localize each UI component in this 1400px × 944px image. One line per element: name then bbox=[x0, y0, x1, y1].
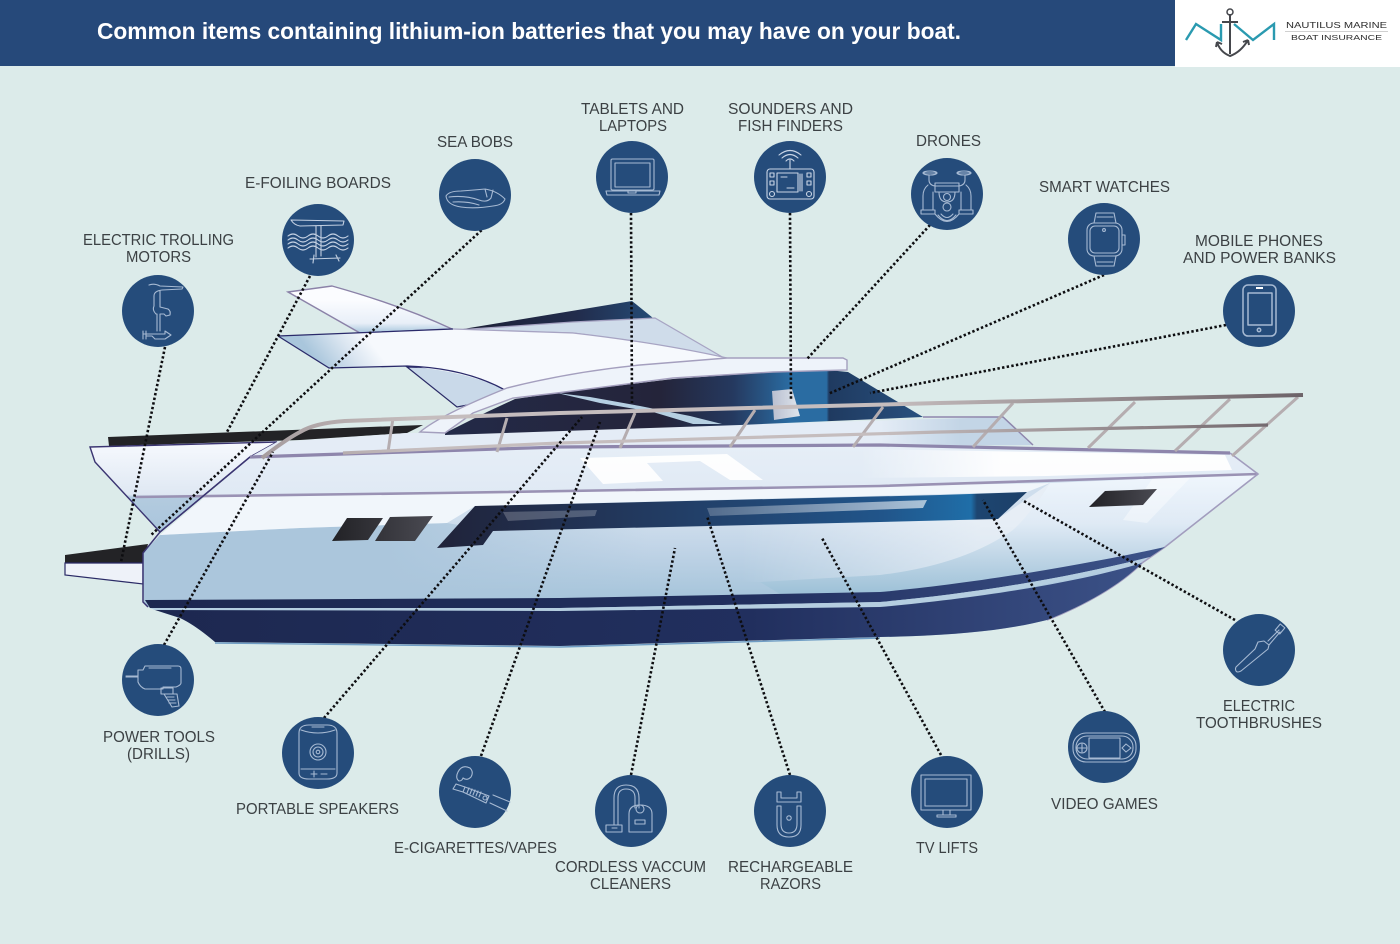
item: tablets and laptops bbox=[581, 101, 684, 213]
label: (DRILLS) bbox=[127, 746, 190, 763]
label: AND POWER BANKS bbox=[1183, 250, 1336, 267]
bow light panel bbox=[1123, 478, 1190, 523]
label bbox=[1183, 233, 1336, 267]
icon: e-foil board bbox=[288, 220, 348, 263]
label: ELECTRIC bbox=[1223, 698, 1295, 715]
label bbox=[728, 859, 853, 893]
item: sounders and fish finders bbox=[728, 101, 853, 213]
leader: toothbrushes bbox=[1022, 500, 1235, 620]
icon: smart watch bbox=[1087, 213, 1125, 266]
cabin glass light streak bbox=[557, 393, 722, 424]
logo: Nautilus Marine Boat Insurance bbox=[1175, 0, 1400, 67]
icon: razor bbox=[777, 792, 801, 837]
leader: sea bobs bbox=[150, 227, 485, 536]
label bbox=[1196, 698, 1322, 732]
windshield light panel bbox=[457, 318, 724, 358]
label: ELECTRIC TROLLING bbox=[83, 232, 234, 249]
label bbox=[83, 232, 234, 266]
icon: drone bbox=[921, 171, 973, 222]
logo wordmark: NAUTILUS MARINE bbox=[1286, 21, 1387, 30]
item: video games bbox=[1051, 711, 1158, 813]
leader: power tools bbox=[164, 452, 273, 645]
long hull window bbox=[437, 492, 1027, 548]
item: cordless vacuum cleaners bbox=[555, 775, 706, 893]
label: CLEANERS bbox=[590, 876, 671, 893]
stern lower solid blue panel bbox=[143, 525, 390, 602]
leader: sounders bbox=[790, 213, 791, 400]
label: TV LIFTS bbox=[916, 840, 978, 857]
label: MOBILE PHONES bbox=[1195, 233, 1323, 250]
icon: fish finder bbox=[767, 150, 814, 199]
label: E-CIGARETTES/VAPES bbox=[394, 840, 557, 857]
white band below belt bbox=[160, 483, 1050, 535]
flybridge deck bbox=[278, 329, 727, 390]
label bbox=[728, 101, 853, 135]
hull stripe upper bbox=[145, 547, 1165, 608]
hull main bbox=[143, 445, 1258, 646]
item: power tools bbox=[103, 644, 215, 763]
label: DRONES bbox=[916, 133, 981, 150]
item: tv lifts bbox=[911, 756, 983, 857]
item: drones bbox=[911, 133, 983, 230]
item: mobile phones and power banks bbox=[1183, 233, 1336, 347]
logo monogram N M bbox=[1186, 24, 1274, 40]
icon: toothbrush bbox=[1236, 624, 1285, 672]
item: electric trolling motors bbox=[83, 232, 234, 347]
label bbox=[581, 101, 684, 135]
label: E-FOILING BOARDS bbox=[245, 175, 391, 192]
leader: tv lifts bbox=[822, 538, 941, 755]
hull waterline stripe bbox=[150, 557, 1150, 611]
item: rechargeable razors bbox=[728, 775, 853, 893]
icon: laptop bbox=[606, 159, 660, 195]
leader: mobile phones bbox=[870, 325, 1226, 393]
logo: Nautilus Marine Boat Insurance: BOAT INSURANCE bbox=[1291, 33, 1382, 42]
hull swoosh bbox=[700, 483, 1050, 582]
label: SEA BOBS bbox=[437, 134, 513, 151]
railings bbox=[262, 395, 1303, 458]
item: e-foiling boards bbox=[245, 175, 391, 276]
stern portholes bbox=[332, 516, 433, 541]
hull window reflections bbox=[503, 510, 597, 521]
label: POWER TOOLS bbox=[103, 729, 215, 746]
icon: sea bob bbox=[446, 189, 505, 208]
bow porthole bbox=[1089, 489, 1157, 507]
label: RAZORS bbox=[760, 876, 821, 893]
icon: smartphone bbox=[1243, 285, 1276, 336]
label: VIDEO GAMES bbox=[1051, 796, 1158, 813]
item: electric toothbrushes bbox=[1196, 614, 1322, 732]
flybridge strut bbox=[407, 367, 520, 407]
icon: speaker bbox=[299, 725, 337, 779]
label: SMART WATCHES bbox=[1039, 179, 1170, 196]
stern wing bbox=[90, 442, 277, 532]
deck highlight panels bbox=[580, 454, 763, 484]
windshield dark bbox=[463, 301, 653, 329]
label: RECHARGEABLE bbox=[728, 859, 853, 876]
swim platform bbox=[65, 544, 148, 563]
icon: drill bbox=[126, 666, 181, 707]
belt line bbox=[135, 474, 1258, 497]
icon: television bbox=[921, 775, 971, 817]
label: MOTORS bbox=[126, 249, 191, 266]
deck topside band bbox=[205, 445, 1258, 497]
title: Common items containing lithium-ion batteries that you may have on your boat. bbox=[97, 18, 961, 44]
windscreen panel bbox=[772, 389, 800, 420]
cabin base bbox=[250, 417, 1033, 457]
label: TOOTHBRUSHES bbox=[1196, 715, 1322, 732]
icon: handheld console bbox=[1073, 733, 1136, 762]
label bbox=[555, 859, 706, 893]
label: TABLETS AND bbox=[581, 101, 684, 118]
header banner bbox=[0, 0, 1175, 66]
icon: vacuum bbox=[606, 785, 652, 832]
leader: tablets and laptops bbox=[631, 213, 632, 403]
leader: drones bbox=[807, 225, 930, 359]
label: FISH FINDERS bbox=[738, 118, 843, 135]
leader: e-cigarettes bbox=[481, 422, 600, 756]
cabin side glass bbox=[445, 370, 923, 435]
deck edge purple line bbox=[250, 445, 1230, 457]
leader: e-foiling boards bbox=[227, 276, 310, 432]
bow outline bbox=[1047, 453, 1258, 620]
aft black deck strip bbox=[108, 425, 423, 446]
leader: razors bbox=[707, 516, 790, 775]
logo anchor bbox=[1216, 14, 1249, 56]
label: PORTABLE SPEAKERS bbox=[236, 801, 399, 818]
stern outline bbox=[143, 457, 250, 607]
hull keel bbox=[155, 563, 1142, 646]
upper radar fin bbox=[288, 286, 452, 333]
yacht illustration bbox=[65, 286, 1303, 647]
label bbox=[103, 729, 215, 763]
item: sea bobs bbox=[437, 134, 513, 231]
leader: vacuum bbox=[631, 548, 675, 775]
icon: vape bbox=[453, 767, 510, 811]
cabin roof arc bbox=[420, 358, 847, 433]
leader: smart watches bbox=[828, 275, 1104, 394]
item: e-cigarettes and vapes bbox=[394, 756, 557, 857]
leader lines bbox=[121, 213, 1235, 775]
icon: trolling motor bbox=[143, 284, 183, 339]
label: SOUNDERS AND bbox=[728, 101, 853, 118]
leader: video games bbox=[983, 500, 1105, 712]
deck highlight bow bbox=[860, 449, 1232, 478]
stern panel fade bbox=[380, 523, 650, 601]
leader: trolling motors bbox=[121, 347, 165, 562]
item: smart watches bbox=[1039, 179, 1170, 275]
bow gradient panel bbox=[760, 474, 1258, 594]
label: LAPTOPS bbox=[599, 118, 667, 135]
label: CORDLESS VACCUM bbox=[555, 859, 706, 876]
item: portable speakers bbox=[236, 717, 399, 818]
leader: speakers bbox=[324, 417, 582, 718]
